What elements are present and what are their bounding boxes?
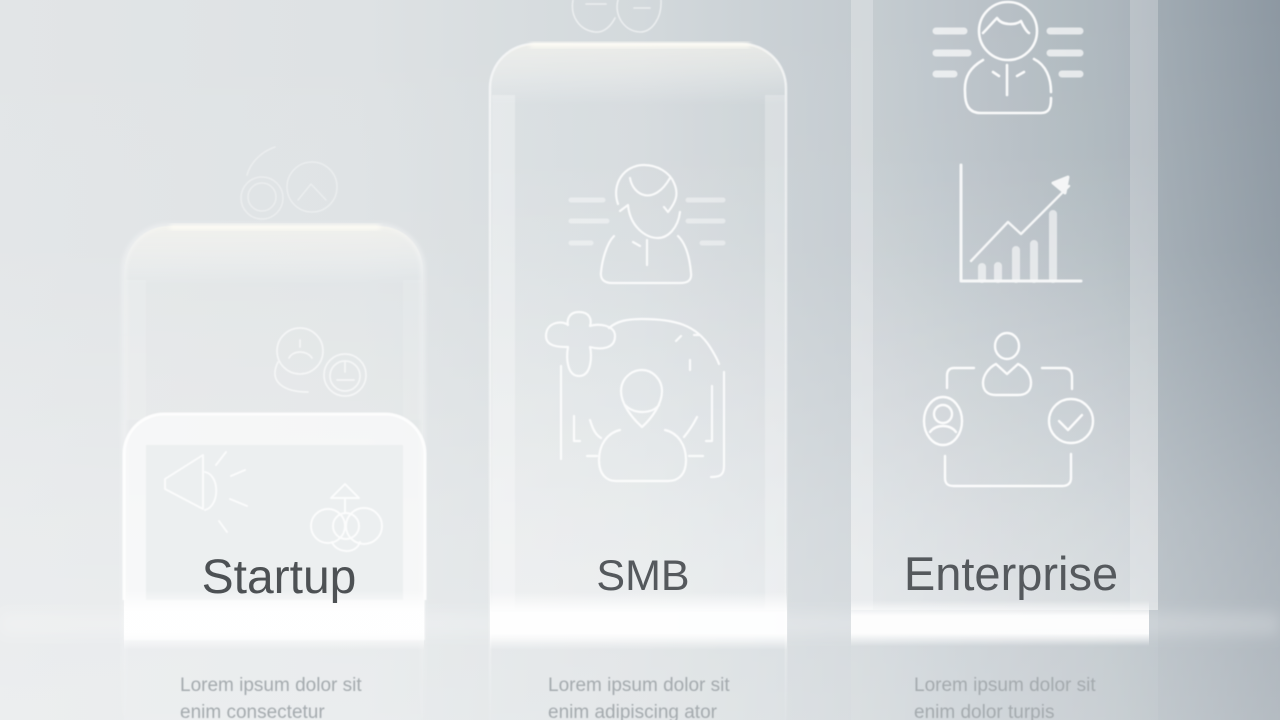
icon: person in frame with plus, SMB [546, 312, 724, 481]
icon: cluster [311, 484, 382, 551]
icon: person with lines, SMB [571, 165, 723, 283]
heading: Startup: Startup [202, 551, 356, 604]
panel: Enterprise column [851, 0, 1158, 720]
text block: Startup description: Lorem ipsum dolor sit [180, 675, 362, 696]
panel: SMB column [490, 43, 786, 720]
heading: Enterprise: Enterprise [904, 547, 1118, 600]
text block: Enterprise description [914, 675, 1096, 720]
icon: people pair [275, 328, 366, 396]
icon: person with lines, Enterprise [936, 2, 1080, 113]
text block: SMB description: Lorem ipsum dolor sit [548, 675, 730, 696]
heading: SMB: SMB [596, 552, 690, 600]
icon: team cycle [924, 333, 1093, 486]
icon: megaphone [165, 452, 247, 532]
icon: links above Startup [241, 147, 337, 219]
text block: SMB description [548, 675, 730, 720]
text block: Enterprise description: Lorem ipsum dolor sit [914, 675, 1096, 696]
panel: Startup column [124, 225, 425, 720]
text block: Startup description [180, 675, 362, 720]
white light band [0, 590, 1280, 650]
icon: growth chart [961, 165, 1081, 281]
front glass card [124, 414, 425, 640]
icon: partial pair above SMB [572, 0, 661, 32]
